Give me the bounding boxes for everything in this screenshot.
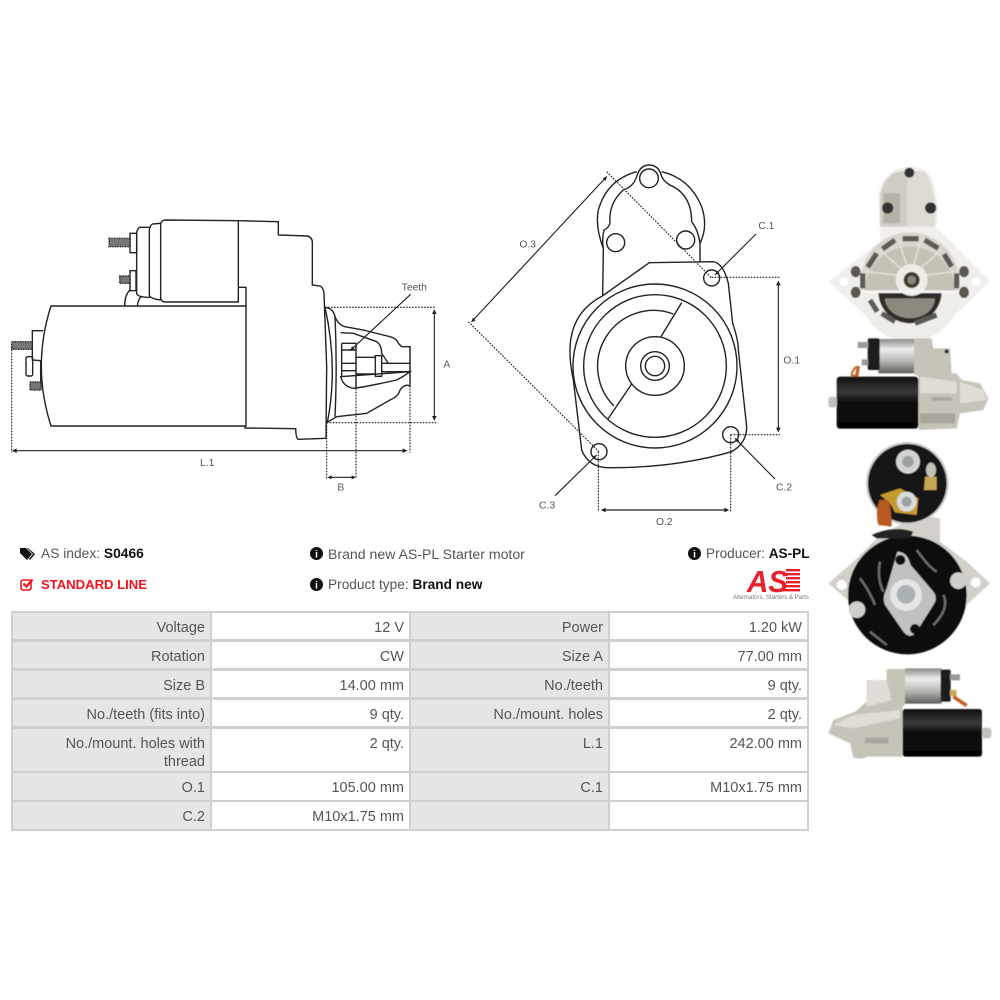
icon: tags: [20, 548, 35, 560]
dimension labels: Teeth: [402, 283, 427, 294]
info line: product type: Product type: Brand new: [328, 577, 482, 592]
icon: info: [310, 578, 323, 591]
row: C.2: [13, 802, 807, 829]
motor housing body: [41, 306, 246, 426]
row: C.2: M10x1.75 mm: [312, 809, 404, 825]
row: C.2: C.2: [182, 809, 205, 825]
row: rotation and size A: Size A: [562, 649, 603, 665]
info line: brand new starter: Brand new AS-PL Starter motor: [328, 546, 525, 562]
dimension labels: C.3: [539, 500, 555, 511]
drive nose with pinion: [325, 307, 410, 423]
solenoid: [109, 220, 246, 306]
row: rotation and size A: Rotation: [151, 649, 205, 665]
photo: drive end view: [828, 167, 990, 342]
logo: AS: Alternators, Starters & Parts: [733, 595, 809, 601]
dimension arrows and leaders: [472, 177, 778, 510]
product photos, top pair: [828, 166, 990, 430]
dimension labels: O.2: [656, 517, 673, 528]
row: threaded holes and L.1: L.1: [583, 736, 603, 752]
row: rotation and size A: CW: [380, 649, 404, 665]
row: threaded holes and L.1: No./mount. holes with thread: [66, 736, 205, 770]
dimension labels: [200, 283, 450, 494]
row: voltage and power: [13, 613, 807, 639]
dimension labels: C.2: [776, 483, 792, 494]
product photos, bottom pair: [828, 442, 992, 760]
photo: side view A: [828, 338, 988, 430]
row: O.1 and C.1: 105.00 mm: [331, 780, 404, 796]
row: O.1 and C.1: [13, 773, 807, 800]
row: O.1 and C.1: C.1: [580, 780, 603, 796]
upper housing with holes: [597, 165, 705, 296]
info line: AS index: AS index: S0466: [41, 546, 144, 561]
photo: solenoid and rear end view: [828, 442, 990, 654]
dimension labels: B: [337, 483, 344, 494]
info line: standard line: STANDARD LINE: [41, 577, 147, 592]
row: teeth fits into and mounting holes: [13, 700, 807, 726]
dimension labels: [519, 221, 800, 528]
row: O.1 and C.1: O.1: [182, 780, 205, 796]
row: threaded holes and L.1: 2 qty.: [370, 736, 404, 752]
dimension labels: C.1: [758, 221, 775, 232]
icon: info: [310, 547, 323, 560]
row: voltage and power: Voltage: [157, 620, 205, 636]
row: teeth fits into and mounting holes: No./mount. holes: [493, 707, 603, 723]
row: teeth fits into and mounting holes: 9 qty.: [370, 707, 404, 723]
technical drawing: front view of starter motor: [468, 164, 800, 528]
concentric rings and hub: [573, 284, 737, 448]
icon: checkbox: [20, 578, 34, 591]
row: size B and teeth: [13, 671, 807, 697]
icon: info: [688, 547, 701, 560]
row: rotation and size A: 77.00 mm: [738, 649, 802, 665]
row: size B and teeth: 14.00 mm: [340, 678, 404, 694]
dimension labels: L.1: [200, 458, 215, 469]
row: O.1 and C.1: M10x1.75 mm: [710, 780, 802, 796]
row: threaded holes and L.1: 242.00 mm: [729, 736, 802, 752]
drive end housing: [238, 221, 327, 439]
row: size B and teeth: No./teeth: [544, 678, 603, 694]
logo: AS: AS: [746, 565, 788, 599]
row: threaded holes and L.1: [13, 729, 807, 771]
row: size B and teeth: 9 qty.: [768, 678, 802, 694]
dimension labels: O.3: [519, 239, 536, 250]
row: rotation and size A: [13, 642, 807, 668]
row: voltage and power: Power: [562, 620, 603, 636]
rear terminals: [12, 331, 43, 390]
row: voltage and power: 12 V: [374, 620, 404, 636]
info line: producer: Producer: AS-PL: [706, 546, 810, 561]
row: size B and teeth: Size B: [163, 678, 205, 694]
row: voltage and power: 1.20 kW: [749, 620, 802, 636]
dimension labels: O.1: [783, 355, 800, 366]
dimension arrows: [13, 294, 434, 477]
row: teeth fits into and mounting holes: No./teeth (fits into): [87, 707, 205, 723]
mounting flange with holes: [570, 262, 747, 468]
dimension extension lines: [12, 307, 437, 479]
logo: AS: [733, 565, 809, 601]
specification table: [11, 611, 809, 831]
dimension extension lines: [468, 172, 780, 512]
technical drawing: side view of starter motor: [10, 219, 450, 494]
row: teeth fits into and mounting holes: 2 qty.: [768, 707, 802, 723]
photo: side view B: [828, 668, 991, 759]
